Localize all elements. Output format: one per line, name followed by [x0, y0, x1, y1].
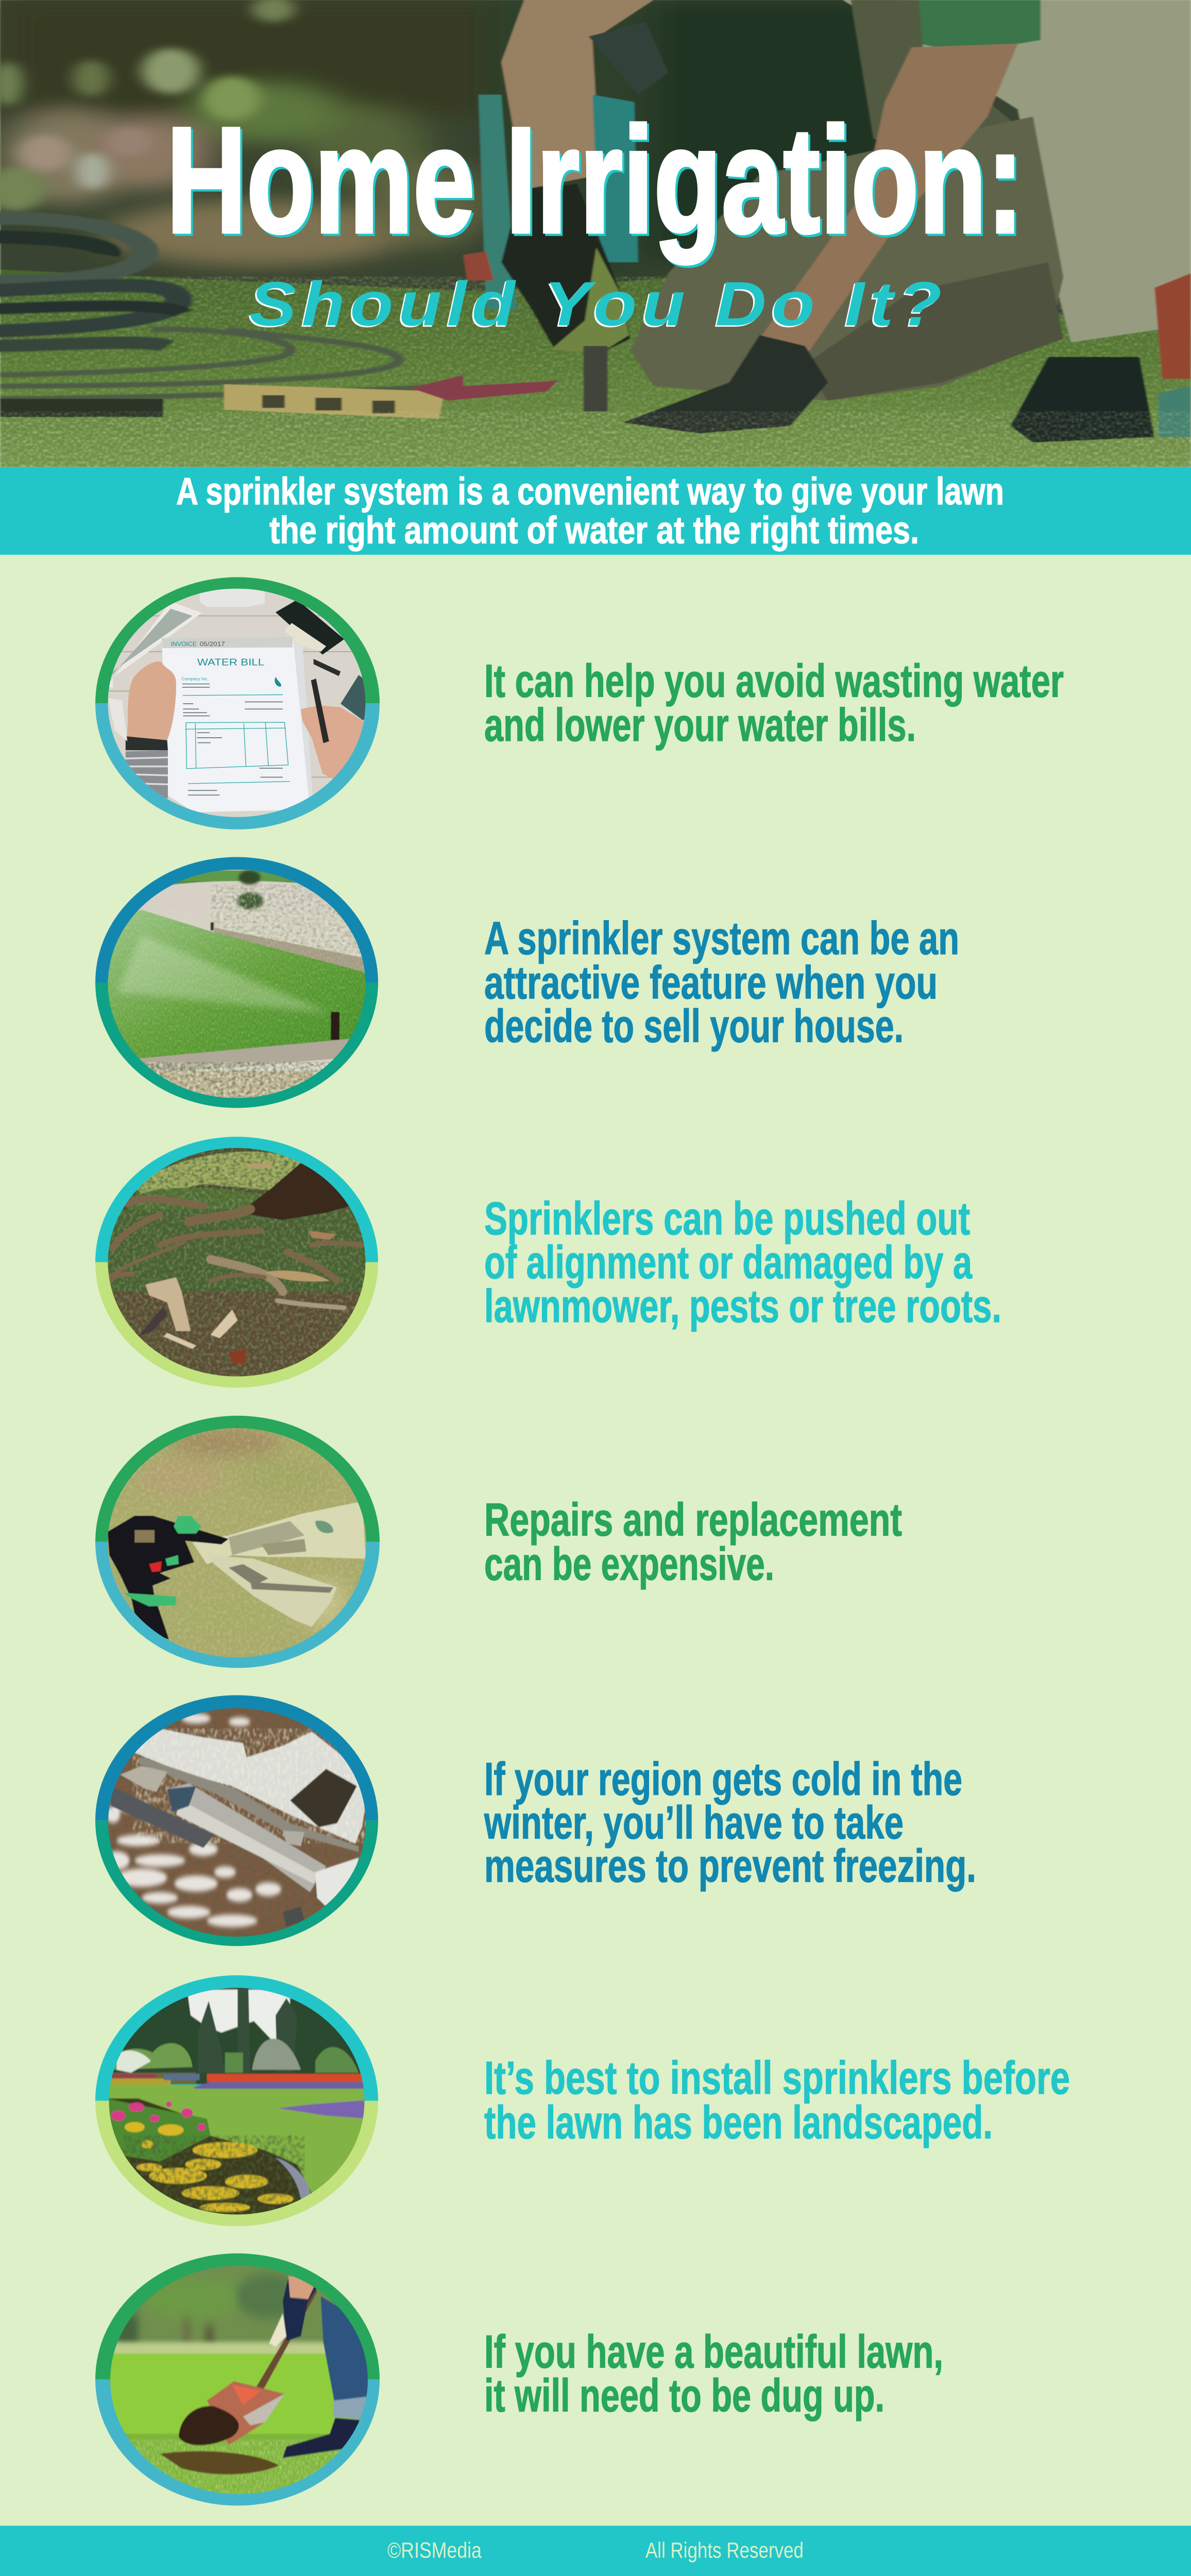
hose coil — [0, 218, 182, 346]
icon: water bill photo — [95, 577, 380, 829]
icon: water bill photo: INVOICE — [171, 640, 197, 648]
subtitle: Should You Do It? — [249, 269, 942, 339]
text: selling your house: A sprinkler system can be an — [484, 913, 959, 964]
panel: damage to sprinklers — [95, 1137, 1001, 1387]
copyright: ©RISMedia — [387, 2538, 482, 2563]
icon: sprinkler with dollar bills photo — [95, 1416, 380, 1668]
level tool — [224, 384, 445, 419]
text: water bills — [484, 656, 1064, 751]
icon: digging with shovel photo — [95, 2253, 380, 2505]
text: selling your house: decide to sell your house. — [484, 1001, 904, 1052]
panel: winter freezing — [95, 1695, 976, 1946]
arm, glove, stake — [501, 0, 653, 190]
icon: tree roots photo — [95, 1137, 378, 1387]
text: digging up the lawn — [484, 2327, 943, 2421]
panel: water bills — [95, 577, 1064, 829]
text: winter freezing: winter, you’ll have to take — [484, 1798, 904, 1849]
text: selling your house — [484, 913, 959, 1052]
intro band: the right amount of water at the right times. — [269, 509, 919, 552]
header photo: man installing a sprinkler on a lawn — [0, 0, 1191, 467]
icon: water bill photo: WATER BILL — [197, 656, 264, 667]
panel: selling your house — [95, 857, 959, 1108]
text: damage to sprinklers: Sprinklers can be pushed out — [484, 1193, 970, 1244]
text: repair costs — [484, 1495, 902, 1590]
panel: repair costs — [95, 1416, 902, 1668]
text: digging up the lawn: If you have a beautiful lawn, — [484, 2327, 943, 2378]
panel: digging up the lawn — [95, 2253, 943, 2505]
icon: water bill photo: 05/2017 — [200, 640, 225, 648]
text: winter freezing — [484, 1754, 976, 1892]
legs and body — [843, 0, 1191, 343]
footer — [0, 2526, 1191, 2576]
icon: lawn sprinkler photo — [95, 857, 378, 1108]
text: damage to sprinklers — [484, 1193, 1001, 1332]
footer: All Rights Reserved — [645, 2538, 804, 2563]
text: repair costs: Repairs and replacement — [484, 1495, 902, 1546]
panel: install before landscaping — [95, 1975, 1070, 2226]
icon: landscaped garden photo — [95, 1975, 378, 2226]
text: selling your house: attractive feature when you — [484, 957, 938, 1009]
text: water bills: and lower your water bills. — [484, 700, 916, 751]
icon: snowy sprinkler pipe photo — [95, 1695, 378, 1946]
lawn — [0, 269, 1191, 467]
text: install before landscaping — [484, 2053, 1070, 2148]
icon: water bill photo: Company Inc. — [182, 676, 208, 682]
text: digging up the lawn: it will need to be dug up. — [484, 2370, 884, 2421]
intro band — [0, 467, 1191, 555]
text: winter freezing: If your region gets cold in the — [484, 1754, 962, 1805]
text: repair costs: can be expensive. — [484, 1539, 774, 1590]
